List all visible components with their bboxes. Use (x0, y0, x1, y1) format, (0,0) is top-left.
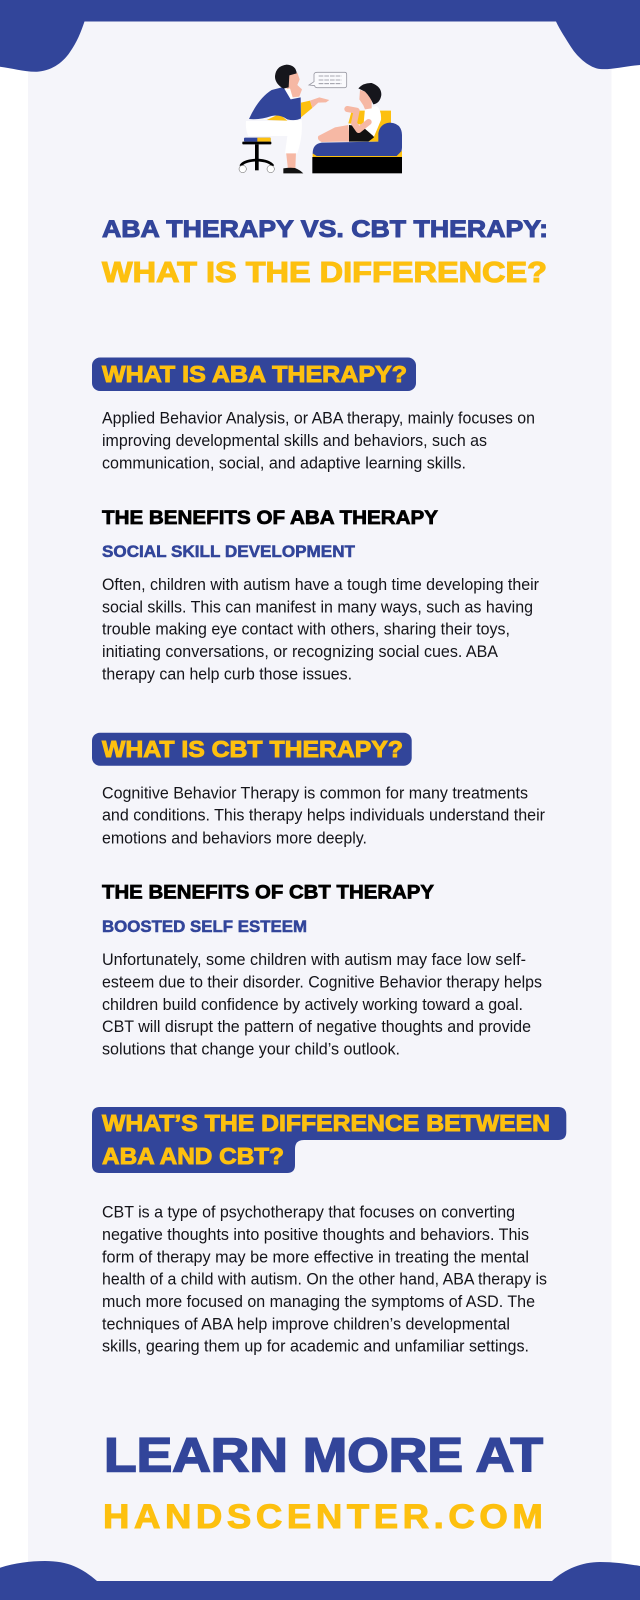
text: social skills (102, 576, 540, 683)
text: social skills: Often, children with autism have a tough time developing their (102, 576, 540, 594)
text: difference explanation (102, 1204, 547, 1356)
text: ABA definition (102, 409, 535, 472)
text: social skills: therapy can help curb those issues. (102, 665, 352, 683)
text: self esteem: children build confidence by actively working toward a goal. (102, 996, 523, 1014)
heading pill: ABA: WHAT IS ABA THERAPY? (102, 361, 407, 387)
heading pill: CBT (92, 733, 412, 766)
text: difference explanation: much more focused on managing the symptoms of ASD. The (102, 1293, 535, 1311)
heading: benefits of ABA: THE BENEFITS OF ABA THERAPY (102, 507, 438, 529)
text: self esteem (102, 951, 542, 1058)
text: difference explanation: techniques of ABA help improve children’s developmental (102, 1315, 510, 1333)
text: social skills: social skills. This can manifest in many ways, such as having (102, 598, 533, 616)
subheading: boosted self esteem: BOOSTED SELF ESTEEM (102, 917, 307, 936)
text: CBT definition: Cognitive Behavior Therapy is common for many treatments (102, 784, 528, 802)
text: ABA definition: Applied Behavior Analysis, or ABA therapy, mainly focuses on (102, 409, 535, 427)
heading pill: difference: WHAT’S THE DIFFERENCE BETWEEN (102, 1110, 550, 1136)
text: social skills: trouble making eye contact with others, sharing their toys, (102, 621, 510, 639)
section: difference (92, 1107, 566, 1356)
text: difference explanation: health of a child with autism. On the other hand, ABA therapy is (102, 1271, 547, 1289)
text: difference explanation: CBT is a type of psychotherapy that focuses on converting (102, 1204, 515, 1222)
call to action (103, 1430, 543, 1536)
title (102, 216, 548, 289)
subheading: social skill development: SOCIAL SKILL DEVELOPMENT (102, 542, 356, 561)
text: ABA definition: improving developmental skills and behaviors, such as (102, 432, 487, 450)
text: self esteem: solutions that change your child’s outlook. (102, 1040, 400, 1058)
bottom wave banner (0, 1561, 640, 1600)
heading: benefits of CBT: THE BENEFITS OF CBT THERAPY (102, 881, 434, 903)
text: self esteem: CBT will disrupt the pattern of negative thoughts and provide (102, 1018, 531, 1036)
icon: stool (239, 138, 274, 173)
text: ABA definition: communication, social, and adaptive learning skills. (102, 454, 466, 472)
section: what is ABA therapy (92, 358, 540, 683)
icon: couch (312, 111, 402, 173)
heading pill: CBT: WHAT IS CBT THERAPY? (102, 736, 403, 762)
heading pill: ABA (92, 358, 416, 391)
title line 1: ABA THERAPY VS. CBT THERAPY: (102, 216, 548, 243)
CTA line 2: HANDSCENTER.COM (103, 1497, 543, 1536)
title line 2: WHAT IS THE DIFFERENCE? (102, 257, 547, 289)
text: self esteem: esteem due to their disorder. Cognitive Behavior therapy helps (102, 973, 542, 991)
icon: child (318, 83, 381, 142)
text: CBT definition: emotions and behaviors more deeply. (102, 829, 367, 847)
icon: therapist (246, 65, 329, 173)
heading pill: difference: ABA AND CBT? (102, 1143, 284, 1169)
heading pill: difference (92, 1107, 566, 1173)
text: difference explanation: negative thoughts into positive thoughts and behaviors. This (102, 1226, 529, 1244)
top wave banner (0, 0, 640, 72)
text: CBT definition: and conditions. This therapy helps individuals understand their (102, 807, 546, 825)
illustration: therapist and child (239, 65, 402, 173)
text: difference explanation: form of therapy may be more effective in treating the mental (102, 1248, 529, 1266)
CTA line 1: LEARN MORE AT (104, 1430, 543, 1482)
text: social skills: initiating conversations, or recognizing social cues. ABA (102, 643, 498, 661)
section: what is CBT therapy (92, 733, 546, 1058)
icon: speech bubble (309, 72, 347, 88)
text: difference explanation: skills, gearing them up for academic and unfamiliar settings. (102, 1338, 529, 1356)
text: self esteem: Unfortunately, some children with autism may face low self- (102, 951, 526, 969)
text: CBT definition (102, 784, 546, 847)
